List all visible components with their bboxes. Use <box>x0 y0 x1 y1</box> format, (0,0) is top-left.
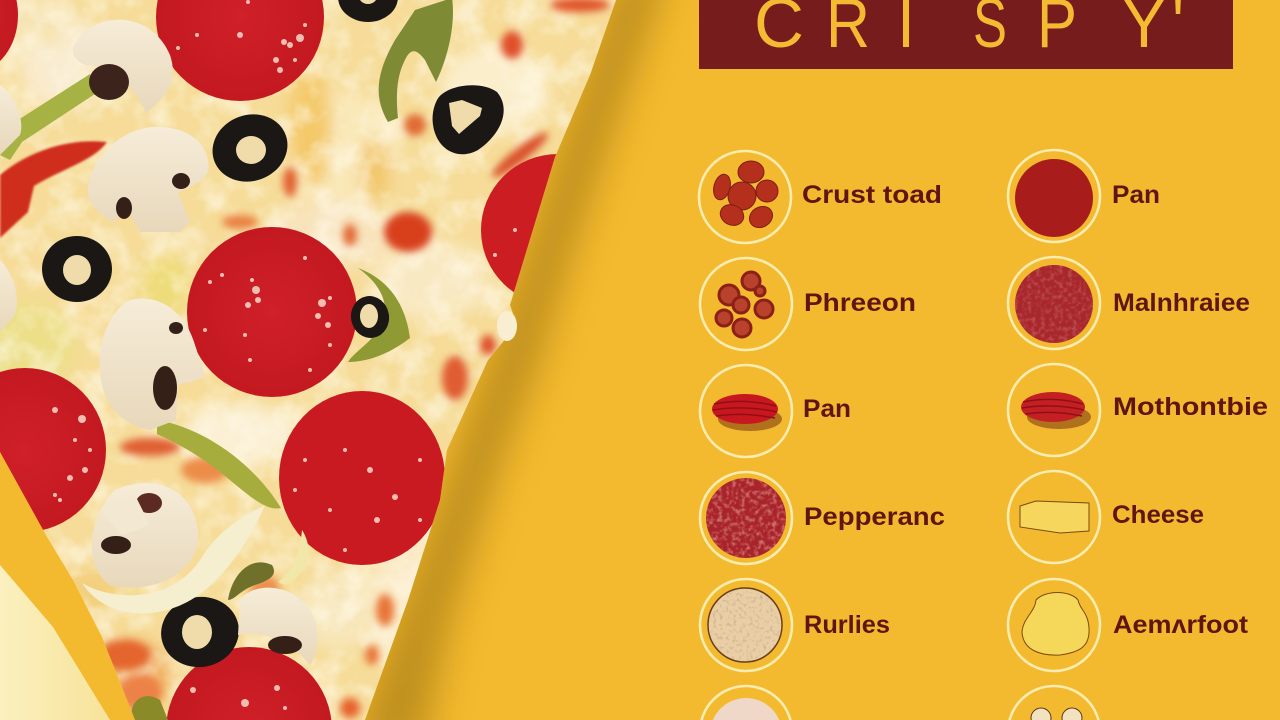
item: bottom right partial <box>1008 686 1202 720</box>
dark herb near bottom <box>228 562 274 600</box>
slice shadow <box>350 0 668 720</box>
title banner <box>699 0 1233 69</box>
item: pan <box>1008 150 1160 242</box>
item: malnhraiee: Malnhraiee <box>1113 289 1250 317</box>
item: aemrfoot: Aemʌrfoot <box>1113 611 1249 639</box>
small olive <box>350 296 390 338</box>
green pepper strip: centre <box>157 420 281 509</box>
item: pepperanc <box>700 472 945 564</box>
dark herb pepper <box>379 0 453 122</box>
pepperoni slices <box>0 0 556 720</box>
item: mothontbie: Mothontbie <box>1113 393 1268 421</box>
item: cheese <box>1008 471 1204 563</box>
pepperoni fat speckles <box>52 0 532 710</box>
white onion ring <box>82 505 265 614</box>
cheese wedge <box>0 565 110 720</box>
item: mothontbie <box>1008 364 1268 456</box>
item: cheese: Cheese <box>1112 501 1204 529</box>
green pepper behind olive <box>348 268 410 362</box>
pizza slice <box>0 0 640 720</box>
ingredient list <box>699 150 1268 720</box>
item: crust load <box>699 151 942 243</box>
item: aemrfoot <box>1008 579 1249 671</box>
mushroom slices <box>0 20 318 665</box>
item: phreeon: Phreeon <box>804 289 916 317</box>
item: phreeon <box>700 258 916 350</box>
item: pan 2: Pan <box>803 395 851 423</box>
item: rurlies: Rurlies <box>804 611 890 639</box>
red pepper <box>0 141 107 238</box>
item: pan: Pan <box>1112 181 1160 209</box>
cheese base <box>0 0 640 720</box>
mushroom gills <box>89 64 302 654</box>
item: malnhraiee <box>1008 257 1250 349</box>
melted cheese highlights <box>0 0 550 710</box>
black olives <box>42 0 504 673</box>
sliced mushroom stem <box>100 499 144 534</box>
pizza edge bump <box>497 311 517 341</box>
item: bottom left partial <box>700 686 929 720</box>
item: pepperanc: Pepperanc <box>804 503 945 531</box>
green pepper strip: top-left <box>0 74 98 160</box>
olive holes <box>63 0 482 649</box>
item: rurlies <box>700 579 890 671</box>
tomato sauce spots <box>99 0 610 718</box>
title text <box>754 0 1184 62</box>
cheese mottling <box>0 0 640 720</box>
item: crust load: Crust toad <box>802 181 942 209</box>
item: pan 2 <box>700 365 851 457</box>
